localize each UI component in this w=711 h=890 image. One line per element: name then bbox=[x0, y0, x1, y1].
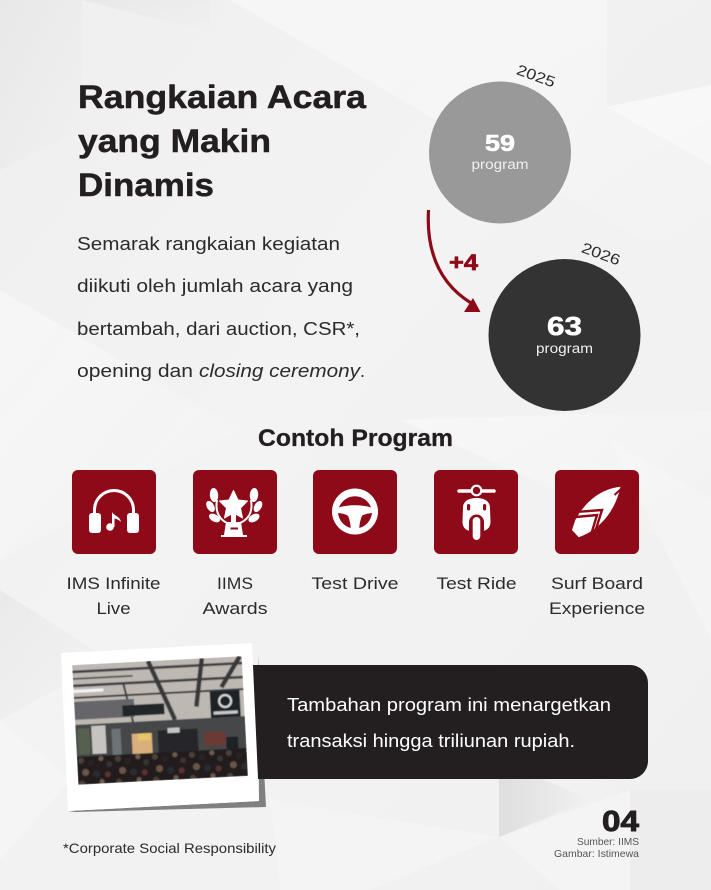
callout bbox=[250, 665, 648, 779]
program: Surf Board Experience bbox=[549, 470, 645, 618]
circle 2026 bbox=[488, 240, 640, 411]
circle 2026: program bbox=[536, 341, 593, 356]
icon: steering wheel bbox=[313, 470, 397, 554]
intro text: diikuti oleh jumlah acara yang bbox=[77, 276, 353, 296]
intro text: opening dan bbox=[77, 361, 193, 381]
callout: transaksi hingga triliunan rupiah. bbox=[287, 731, 575, 751]
program: Test Drive: Test Drive bbox=[312, 574, 398, 593]
arrow: plus four: +4 bbox=[449, 250, 479, 275]
program: Surf Board Experience: Surf Board bbox=[551, 574, 643, 593]
program: IIMS Awards: Awards bbox=[202, 599, 268, 618]
program: IMS Infinite Live: IMS Infinite bbox=[66, 574, 160, 593]
circle 2025: 59 bbox=[485, 130, 515, 156]
program: IMS Infinite Live bbox=[66, 470, 160, 618]
title bbox=[78, 79, 366, 203]
photo: exhibition hall bbox=[72, 656, 248, 785]
intro text: . bbox=[360, 361, 365, 381]
program: IIMS Awards bbox=[193, 470, 277, 618]
polaroid shadow bbox=[68, 655, 266, 812]
title: yang Makin bbox=[78, 123, 271, 159]
page number: 04 bbox=[602, 806, 639, 838]
polaroid photo bbox=[61, 643, 259, 811]
program: IIMS Awards: IIMS bbox=[217, 574, 253, 593]
heading: contoh program: Contoh Program bbox=[258, 425, 453, 452]
intro text: Semarak rangkaian kegiatan bbox=[77, 234, 340, 254]
footnote: *Corporate Social Responsibility bbox=[63, 840, 276, 856]
program: Test Ride: Test Ride bbox=[436, 574, 516, 593]
source credits: Sumber: IIMS bbox=[577, 836, 639, 848]
intro text: bertambah, dari auction, CSR*, bbox=[77, 319, 360, 339]
circle 2026: 63 bbox=[547, 311, 582, 341]
icon: headphones bbox=[72, 470, 156, 554]
arrow: plus four bbox=[428, 210, 480, 312]
callout: Tambahan program ini menargetkan bbox=[287, 695, 611, 715]
intro text bbox=[77, 234, 365, 381]
circle 2026: 2026 bbox=[579, 240, 623, 269]
icon: scooter bbox=[434, 470, 518, 554]
title: Rangkaian Acara bbox=[78, 79, 366, 115]
program: IMS Infinite Live: Live bbox=[96, 599, 130, 618]
title: Dinamis bbox=[78, 167, 214, 203]
program: Surf Board Experience: Experience bbox=[549, 599, 645, 618]
icon: surfboard bbox=[555, 470, 639, 554]
source credits: Gambar: Istimewa bbox=[554, 848, 639, 860]
circle 2025: program bbox=[472, 157, 528, 172]
intro text: closing ceremony bbox=[199, 361, 361, 381]
circle 2025: 2025 bbox=[514, 62, 558, 91]
icon: award trophy bbox=[193, 470, 277, 554]
program: Test Drive bbox=[312, 470, 398, 593]
circle 2025 bbox=[429, 62, 571, 223]
program: Test Ride bbox=[434, 470, 518, 593]
source credits bbox=[554, 836, 639, 860]
